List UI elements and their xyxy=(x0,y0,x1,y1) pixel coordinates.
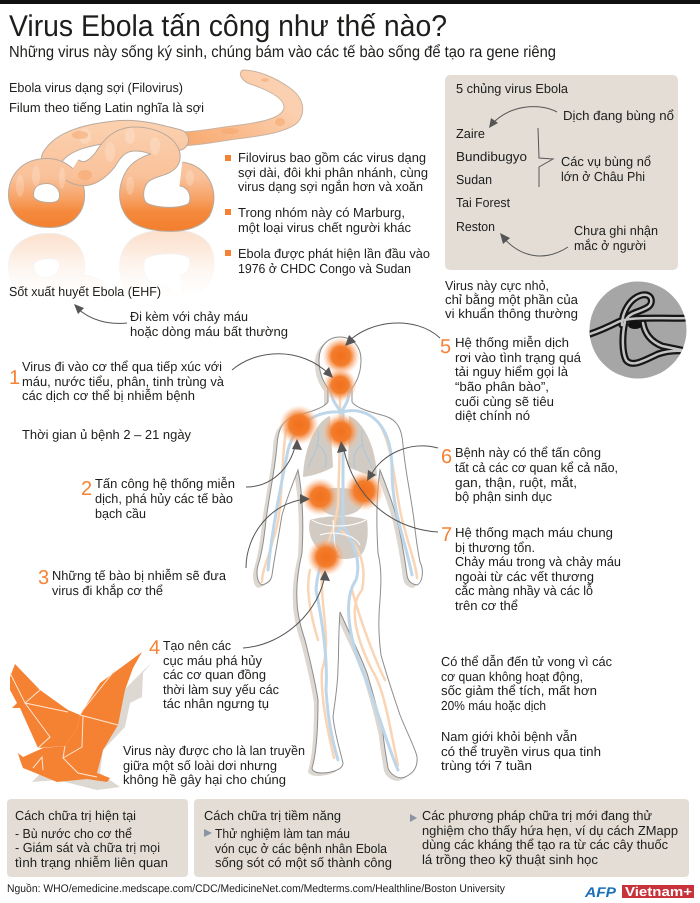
step 6 xyxy=(441,445,618,504)
panel: potential treatment: vón cục ở các bệnh nhân Ebola xyxy=(215,841,388,856)
step 5: diệt chính nó xyxy=(455,408,530,423)
step 5: 5 xyxy=(440,336,451,358)
step 2: 2 xyxy=(81,478,92,500)
filovirus bullet list: Trong nhóm này có Marburg, xyxy=(238,205,405,220)
panel: 5 Ebola strains: Reston xyxy=(456,219,495,234)
virus size note: Virus này cực nhỏ, xyxy=(445,278,549,293)
step 4: Tạo nên các xyxy=(163,638,231,653)
step 7: ngoài từ các vết thương xyxy=(455,569,594,584)
panel: potential treatment: nghiệm cho thấy hứa hẹn, ví dụ cách ZMapp xyxy=(422,823,678,838)
panel: potential treatment: Cách chữa trị tiềm năng xyxy=(204,808,341,823)
panel: 5 Ebola strains: mắc ở người xyxy=(574,238,646,253)
filovirus definition text: Filum theo tiếng Latin nghĩa là sợi xyxy=(9,100,204,115)
step 1: Thời gian ủ bệnh 2 – 21 ngày xyxy=(22,427,191,442)
outcome notes: Có thể dẫn đến tử vong vì các xyxy=(441,654,612,669)
step 4: cục máu phá hủy xyxy=(163,653,262,668)
filovirus bullet list: sợi dài, đôi khi phân nhánh, cùng xyxy=(238,165,428,180)
step 6: gan, thận, ruột, mắt, xyxy=(455,475,577,490)
filovirus bullet list: Ebola được phát hiện lần đầu vào xyxy=(238,246,430,261)
reflection of strand xyxy=(8,231,214,278)
outcome notes: Nam giới khỏi bệnh vẫn xyxy=(441,729,577,744)
step 1: 1 xyxy=(9,367,20,389)
panel: 5 Ebola strains: Tai Forest xyxy=(456,195,510,210)
EHF note with arrow: hoặc dòng máu bất thường xyxy=(130,324,288,339)
photo: electron micrograph of virus xyxy=(590,282,690,378)
filovirus definition text xyxy=(9,80,204,115)
step 2: bạch cầu xyxy=(95,506,146,521)
filovirus bullet list xyxy=(225,150,430,276)
step 1: Virus đi vào cơ thể qua tiếp xúc với xyxy=(22,359,222,374)
panel: 5 Ebola strains: Zaire xyxy=(456,126,485,141)
EHF note with arrow: Đi kèm với chảy máu xyxy=(130,309,248,324)
arrow: step 3 to abdomen xyxy=(246,494,310,568)
panel: 5 Ebola strains: Các vụ bùng nổ xyxy=(561,154,651,169)
step 6: Bệnh này có thể tấn công xyxy=(455,445,601,460)
source line: Nguồn: WHO/emedicine.medscape.com/CDC/MedicineNet.com/Medterms.com/Healthline/Boston University xyxy=(7,883,505,895)
step 7: Chảy máu trong và chảy máu xyxy=(455,554,621,569)
panel: current treatment: Cách chữa trị hiện tại xyxy=(15,808,136,823)
panel: 5 Ebola strains: lớn ở Châu Phi xyxy=(561,169,645,184)
step 6: bộ phận sinh dục xyxy=(455,489,552,504)
infection hotspots xyxy=(279,337,384,576)
panel: current treatment xyxy=(7,799,188,877)
outcome notes: có thể truyền virus qua tinh xyxy=(441,744,601,759)
bat note: giữa một số loài dơi nhưng xyxy=(123,758,277,773)
outcome notes xyxy=(441,654,612,773)
arrow: step 5 to head xyxy=(345,323,440,346)
peach blood vessels xyxy=(262,396,417,765)
step 4: 4 xyxy=(149,637,160,659)
panel: 5 Ebola strains: Bundibugyo xyxy=(456,149,527,164)
logo: AFP: AFP xyxy=(584,884,617,900)
step 7: 7 xyxy=(441,524,452,546)
step 5: “bão phân bào”, xyxy=(455,379,549,394)
step 2: dịch, phá hủy các tế bào xyxy=(95,491,233,506)
filovirus bullet list: Filovirus bao gồm các virus dạng xyxy=(238,150,426,165)
step 7: cắc màng nhầy và các lỗ xyxy=(455,583,593,598)
outcome notes: 20% máu hoặc dịch xyxy=(441,698,546,713)
step 5: cuối cùng sẽ tiêu xyxy=(455,394,554,409)
bat note: Virus này được cho là lan truyền xyxy=(123,743,305,758)
step 5 xyxy=(440,335,582,423)
step 3: 3 xyxy=(38,567,49,589)
step 1: các dịch cơ thể bị nhiễm bệnh xyxy=(22,388,195,403)
outcome notes: cơ quan không hoạt động, xyxy=(441,669,583,684)
panel: current treatment: tình trạng nhiễm liên quan xyxy=(15,855,168,870)
step 4: các cơ quan đồng xyxy=(163,667,266,682)
step 7: trên cơ thể xyxy=(455,598,518,613)
arrow: step 4 to lower abdomen xyxy=(243,570,330,648)
panel: potential treatment: Các phương pháp chữa trị mới đang thử xyxy=(422,808,652,823)
step 5: rơi vào tình trạng quá xyxy=(455,350,582,365)
subtitle: Những virus này sống ký sinh, chúng bám vào các tế bào sống để tạo ra gene riêng xyxy=(9,44,556,61)
step 1: máu, nước tiểu, phân, tinh trùng và xyxy=(22,374,225,389)
step 2 xyxy=(81,476,235,521)
bat note xyxy=(123,743,305,787)
step 3: virus đi khắp cơ thể xyxy=(52,583,163,598)
panel: potential treatment: dùng các kháng thể tạo ra từ các cây thuốc xyxy=(422,837,668,852)
panel: 5 Ebola strains xyxy=(445,75,678,270)
EHF note with arrow xyxy=(74,304,288,339)
top bar xyxy=(0,0,700,4)
illustration: bat xyxy=(10,652,152,790)
step 6: tất cả các cơ quan kể cả não, xyxy=(455,460,618,475)
panel: 5 Ebola strains: Chưa ghi nhận xyxy=(574,223,658,238)
step 5: Hệ thống miễn dịch xyxy=(455,335,569,350)
step 6: 6 xyxy=(441,446,452,468)
virus size note: chỉ bằng một phần của xyxy=(445,292,579,307)
panel: potential treatment: lá trồng theo kỹ thuật sinh học xyxy=(422,852,598,867)
organs xyxy=(303,416,377,559)
illustration: filovirus strand xyxy=(8,70,304,278)
arrow: step 6 to side organ xyxy=(367,446,438,481)
bat note: không hề gây hại cho chúng xyxy=(123,772,286,787)
title: Virus Ebola tấn công như thế nào? xyxy=(9,10,447,43)
logo: Vietnam+: Vietnam+ xyxy=(625,884,692,899)
arrow: step 2 to shoulder xyxy=(246,439,302,487)
step 4: thời làm suy yếu các xyxy=(163,682,279,697)
filovirus bullet list: 1976 ở CHDC Congo và Sudan xyxy=(238,261,411,276)
step 5: tải nguy hiểm gọi là xyxy=(455,364,569,379)
outcome notes: trùng tới 7 tuần xyxy=(441,758,532,773)
step 7: Hệ thống mạch máu chung xyxy=(455,525,613,540)
step 4 xyxy=(149,637,279,711)
panel: 5 Ebola strains: Dịch đang bùng nổ xyxy=(563,108,674,123)
filovirus definition text: Ebola virus dạng sợi (Filovirus) xyxy=(9,80,183,95)
blue blood vessels xyxy=(268,385,412,770)
panel: potential treatment xyxy=(194,799,689,877)
step 7 xyxy=(441,524,621,613)
step 3: Những tế bào bị nhiễm sẽ đưa xyxy=(52,568,227,583)
step 4: tác nhân ngưng tụ xyxy=(163,696,269,711)
panel: current treatment: - Bù nước cho cơ thể xyxy=(15,826,132,841)
arrow: step 1 to throat xyxy=(232,354,333,378)
panel: current treatment: - Giám sát và chữa trị mọi xyxy=(15,840,160,855)
panel: potential treatment: sống sót có một số thành công xyxy=(215,855,392,870)
step 7: bị thương tổn. xyxy=(455,540,535,555)
step 1 xyxy=(9,359,225,442)
virus size note xyxy=(445,278,579,321)
virus size note: vi khuẩn thông thường xyxy=(445,306,578,321)
EHF label: Sốt xuất huyết Ebola (EHF) xyxy=(9,284,161,299)
step 3 xyxy=(38,567,227,598)
arrow: step 7 to heart xyxy=(337,441,438,532)
panel: 5 Ebola strains: 5 chủng virus Ebola xyxy=(456,81,569,96)
filovirus bullet list: virus dạng sợi ngắn hơn và xoăn xyxy=(238,179,423,194)
illustration: human body xyxy=(253,337,422,781)
step 2: Tấn công hệ thống miễn xyxy=(95,476,235,491)
filovirus bullet list: một loại virus chết người khác xyxy=(238,220,411,235)
panel: 5 Ebola strains: Sudan xyxy=(456,172,492,187)
panel: potential treatment: Thử nghiệm làm tan máu xyxy=(215,826,350,841)
outcome notes: sốc giảm thể tích, mất hơn xyxy=(441,683,597,698)
